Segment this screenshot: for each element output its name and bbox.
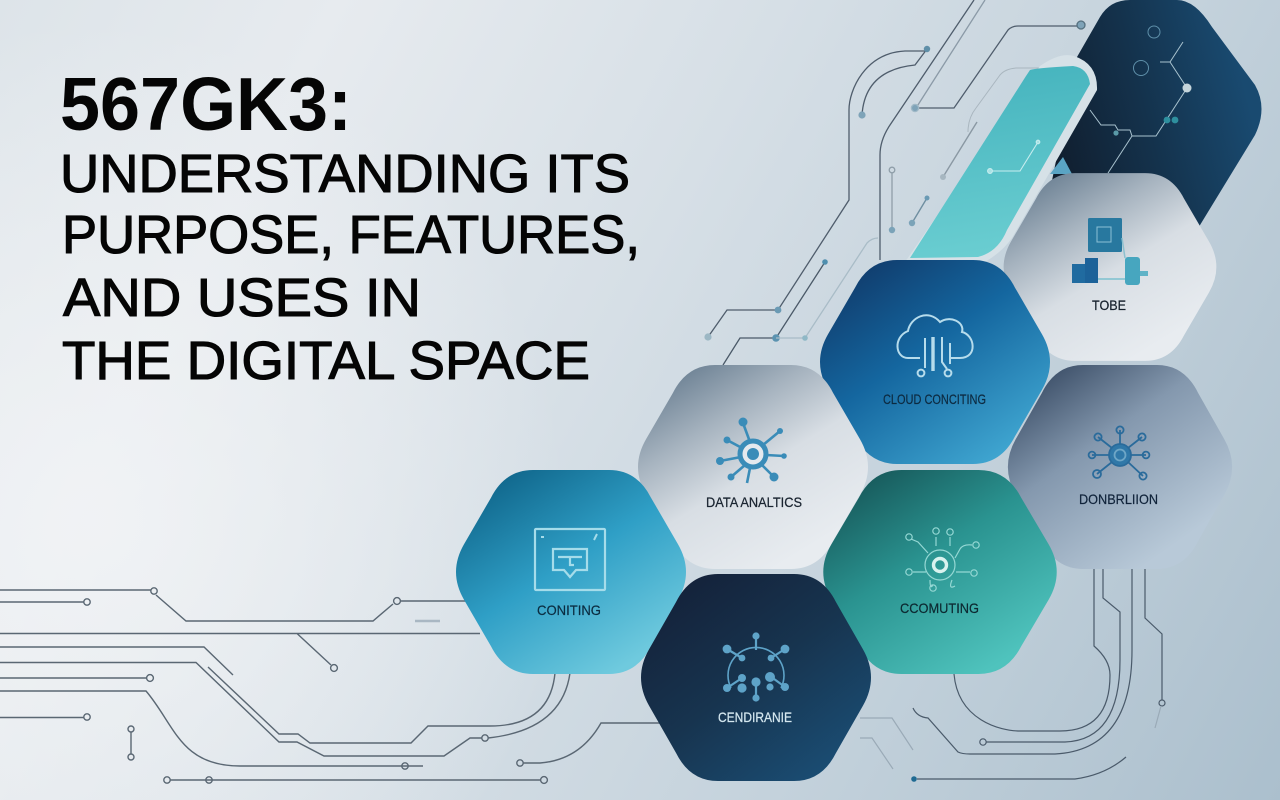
hexagon: data analytics [638, 365, 868, 569]
label: cendi: CENDIRANIE [718, 709, 792, 725]
title line: purpose, features: PURPOSE, FEATURES, [62, 205, 640, 265]
icon: connector inside teal bar [988, 140, 1040, 173]
label: conting: CONITING [537, 602, 601, 618]
icon: network nodes on dark hexagon [1090, 26, 1192, 173]
circuit lines: bottom right [860, 569, 1165, 782]
icon: tobe blocks [1072, 218, 1148, 285]
hexagon: donation [1008, 365, 1232, 569]
panel: teal diagonal bar [905, 55, 1097, 262]
label: donation: DONBRLIION [1079, 491, 1158, 507]
icon: ring of nodes [723, 632, 789, 702]
icon: donation hub [1089, 426, 1149, 480]
hexagon: dark top [1040, 0, 1262, 240]
circuit lines: top centre [704, 0, 1085, 365]
hexagon: tobe [1004, 173, 1216, 361]
title line: and uses in: AND USES IN [63, 268, 421, 328]
title line: the digital space: THE DIGITAL SPACE [62, 331, 590, 391]
title line: understanding its: UNDERSTANDING ITS [60, 144, 630, 204]
icon: cloud [897, 315, 973, 376]
label: tobe: TOBE [1092, 297, 1126, 313]
small blue wedge behind hexagon [1050, 157, 1072, 174]
hexagon: conting [456, 470, 686, 674]
icon: data analytics network [716, 418, 787, 483]
icon: computing network [906, 528, 979, 591]
label: cloud computing: CLOUD CONCITING [883, 391, 986, 407]
label: data analytics: DATA ANALTICS [706, 494, 802, 510]
label: computing: CCOMUTING [900, 600, 979, 616]
circuit lines: bottom left [0, 588, 670, 783]
hexagon: cloud computing [820, 260, 1050, 464]
icon: window with speech box [535, 529, 605, 590]
title line: 567GK3: 567GK3: [60, 62, 352, 146]
title [60, 62, 640, 391]
hexagon: cendi [641, 574, 871, 781]
hexagon: computing [823, 470, 1057, 674]
